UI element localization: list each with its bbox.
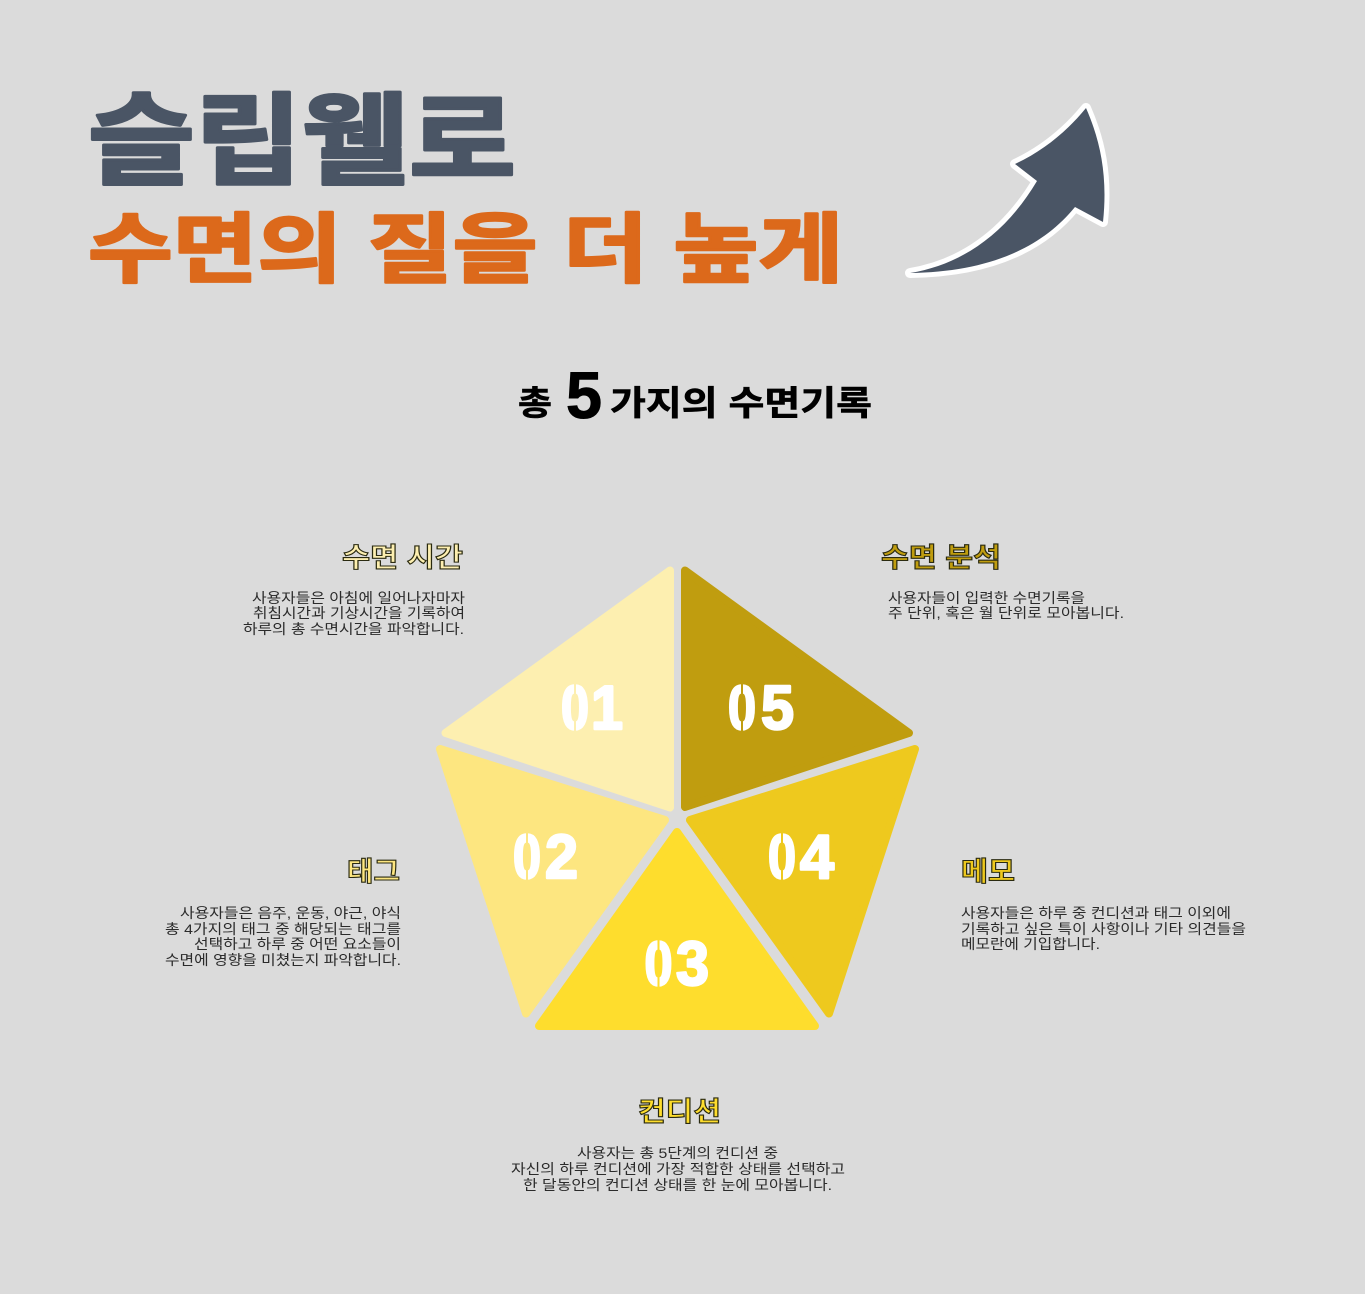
description: 수면 시간: 하루의 총 수면시간을 파악합니다. bbox=[243, 621, 464, 637]
description: 태그: 수면에 영향을 미쳤는지 파악합니다. bbox=[165, 952, 401, 968]
block: 컨디션 bbox=[511, 1097, 845, 1193]
heading: 메모: 메모 bbox=[961, 857, 1015, 887]
heading: 총 5가지의 수면기록: 가지의 수면기록 bbox=[610, 385, 872, 423]
description: 수면 분석: 주 단위, 혹은 월 단위로 모아봅니다. bbox=[888, 605, 1124, 621]
description: 수면 시간: 사용자들은 아침에 일어나자마자 bbox=[252, 590, 465, 606]
number 04: 4 bbox=[800, 823, 835, 892]
description: 컨디션: 자신의 하루 컨디션에 가장 적합한 상태를 선택하고 bbox=[511, 1161, 845, 1177]
description: 태그 bbox=[165, 905, 401, 968]
number 04: 0 bbox=[768, 823, 796, 892]
description: 태그: 선택하고 하루 중 어떤 요소들이 bbox=[194, 936, 401, 952]
description: 컨디션: 한 달동안의 컨디션 상태를 한 눈에 모아봅니다. bbox=[523, 1177, 832, 1193]
description: 컨디션 bbox=[511, 1145, 845, 1193]
description: 메모: 사용자들은 하루 중 컨디션과 태그 이외에 bbox=[961, 905, 1231, 921]
heading: 컨디션: 컨디션 bbox=[638, 1097, 721, 1127]
segment 05 bbox=[685, 570, 909, 807]
number 03: 3 bbox=[676, 930, 709, 999]
number 02 bbox=[513, 823, 578, 892]
heading: 총 5가지의 수면기록: 총 bbox=[518, 385, 552, 423]
block: 수면 분석 bbox=[881, 543, 1124, 621]
number 03: 0 bbox=[644, 930, 672, 999]
description: 수면 시간: 취침시간과 기상시간을 기록하여 bbox=[253, 605, 465, 621]
description: 컨디션: 사용자는 총 5단계의 컨디션 중 bbox=[577, 1145, 778, 1161]
description: 메모: 기록하고 싶은 특이 사항이나 기타 의견들을 bbox=[961, 921, 1246, 937]
number 05: 0 bbox=[728, 674, 756, 743]
icon: rising arrow bbox=[910, 108, 1104, 273]
segment 02 bbox=[440, 749, 665, 1014]
number 02: 0 bbox=[513, 823, 541, 892]
pentagon chart bbox=[440, 570, 915, 1026]
description: 수면 분석: 사용자들이 입력한 수면기록을 bbox=[888, 590, 1085, 606]
block: 태그 bbox=[165, 857, 401, 968]
segment 01 bbox=[446, 570, 670, 808]
block: 메모 bbox=[961, 857, 1246, 952]
heading: 수면 분석: 수면 분석 bbox=[881, 543, 1001, 573]
subtitle: 수면의 질을 더 높게: 수면의 질을 더 높게 bbox=[88, 208, 843, 293]
number 01: 0 bbox=[561, 674, 589, 743]
heading: 태그: 태그 bbox=[347, 857, 400, 887]
number 04 bbox=[768, 823, 835, 892]
number 02: 2 bbox=[545, 823, 578, 892]
number 03 bbox=[644, 930, 709, 999]
number 01: 1 bbox=[591, 674, 623, 743]
number 01 bbox=[561, 674, 623, 743]
heading: 총 5가지의 수면기록: 5 bbox=[566, 358, 602, 432]
segment 04 bbox=[690, 749, 915, 1014]
description: 태그: 사용자들은 음주, 운동, 야근, 야식 bbox=[180, 905, 401, 921]
description: 수면 시간 bbox=[243, 590, 465, 637]
description: 메모 bbox=[961, 905, 1246, 952]
description: 메모: 메모란에 기입합니다. bbox=[961, 936, 1100, 952]
description: 태그: 총 4가지의 태그 중 해당되는 태그를 bbox=[165, 921, 401, 937]
heading: 수면 시간: 수면 시간 bbox=[342, 543, 463, 573]
number 05: 5 bbox=[761, 674, 794, 743]
number 05 bbox=[728, 674, 794, 743]
segment 03 bbox=[539, 832, 815, 1026]
heading: 총 5가지의 수면기록 bbox=[518, 358, 872, 432]
block: 수면 시간 bbox=[243, 543, 465, 637]
title: 슬립웰로: 슬립웰로 bbox=[88, 86, 516, 198]
description: 수면 분석 bbox=[888, 590, 1124, 621]
